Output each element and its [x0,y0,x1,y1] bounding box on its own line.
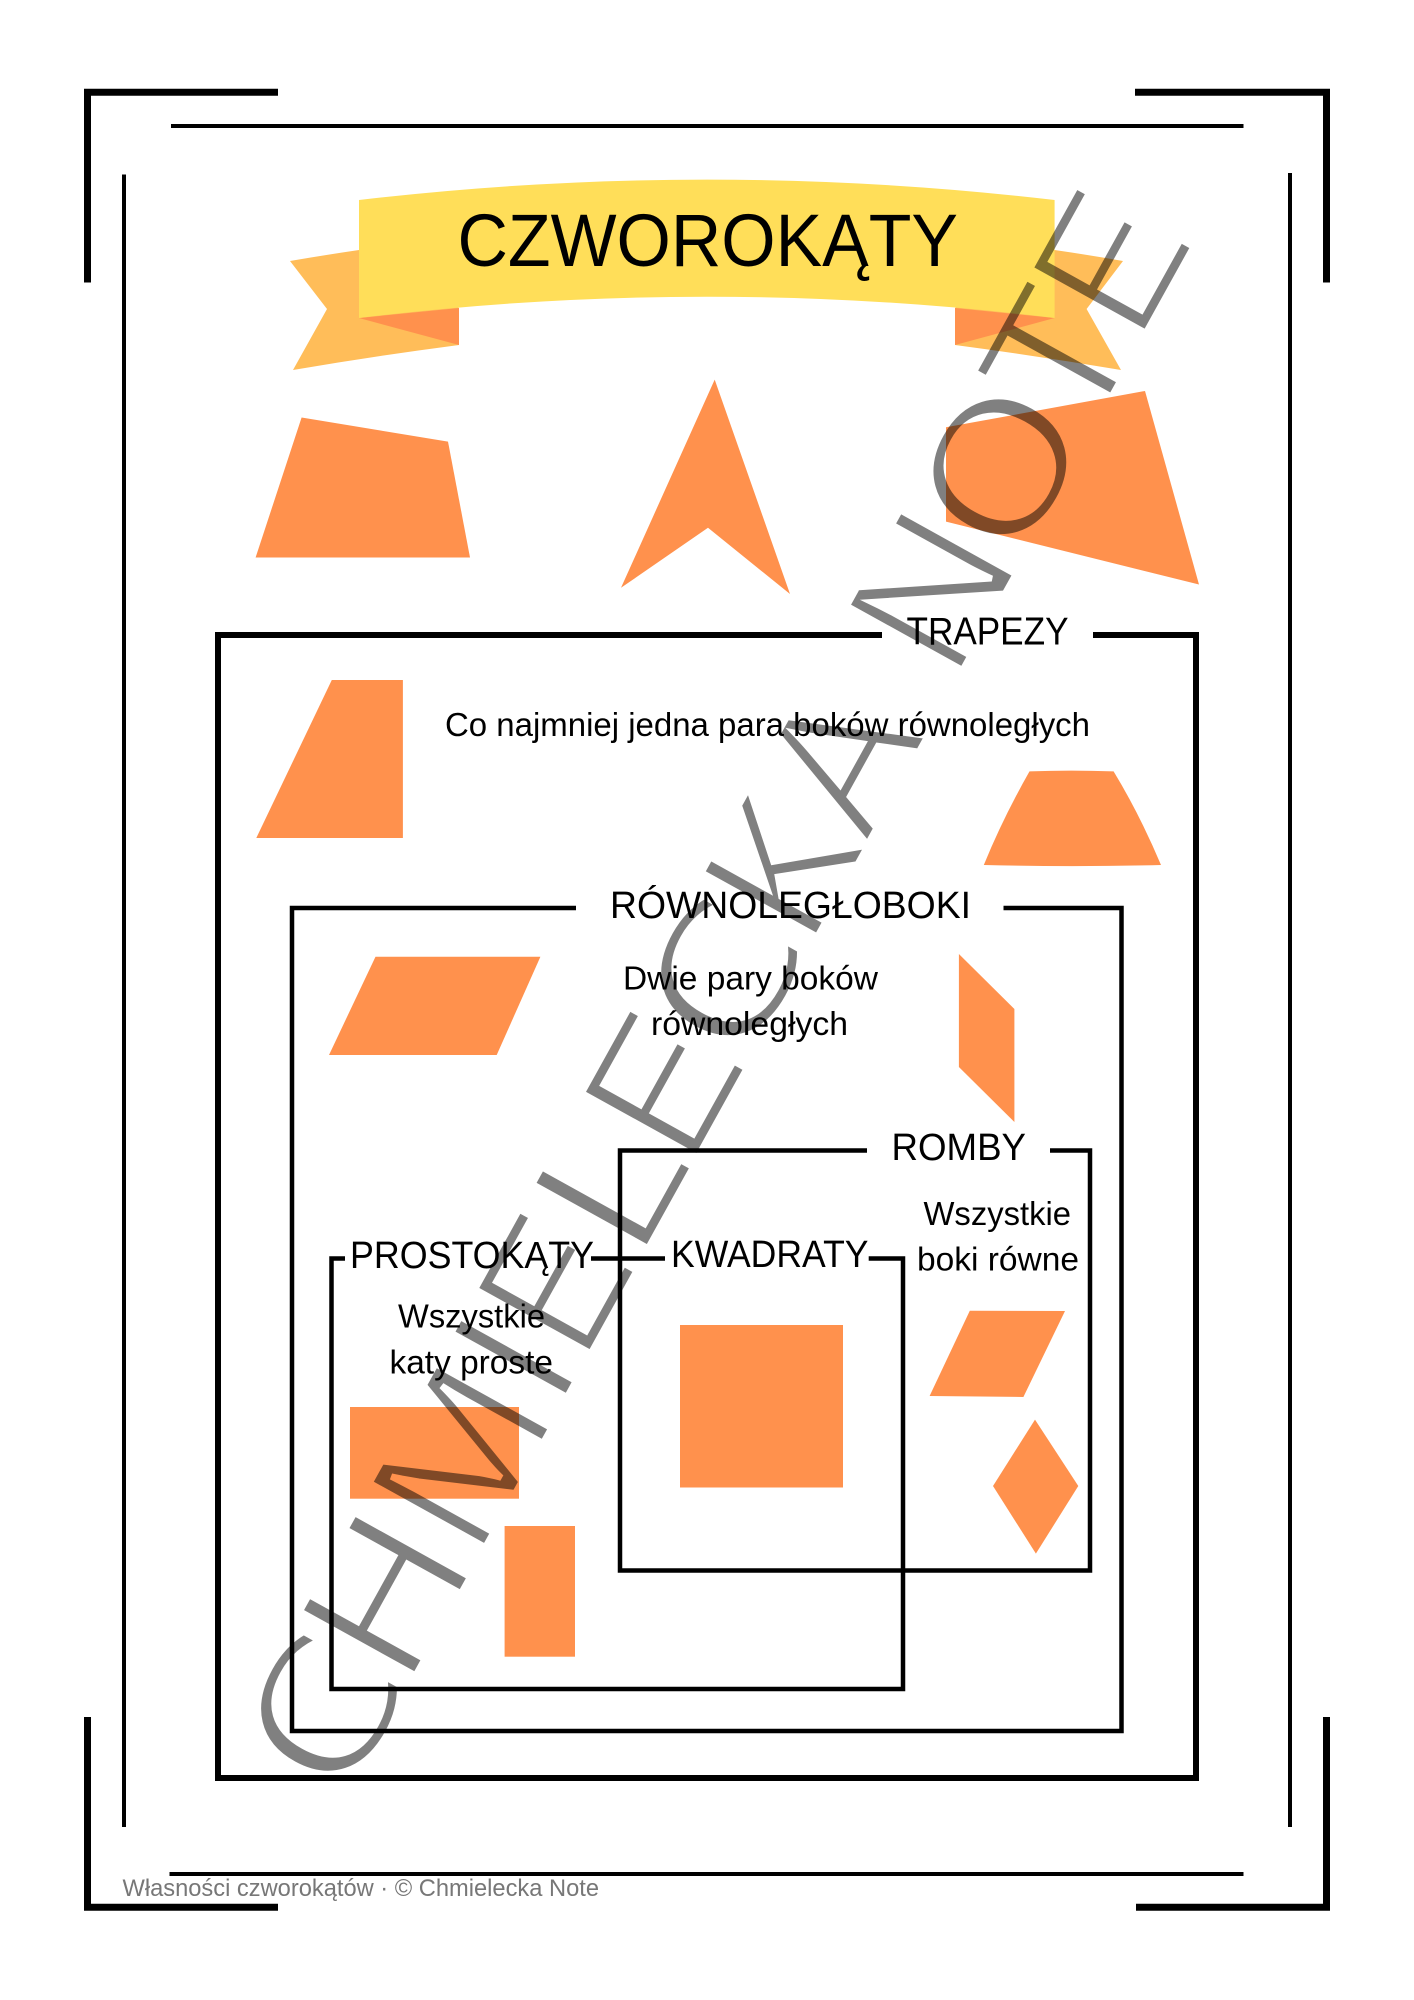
prostokąty description [390,1298,553,1381]
shape: rhombus slanted [930,1311,1065,1397]
watermark: CHMIELECKA NOTE: H [256,1478,514,1710]
title: CZWOROKĄTY [458,199,958,282]
outer frame: corner brackets and thin lines [88,92,1326,1907]
panel: romby [620,1127,1090,1570]
panel: trapezy [218,610,1196,1778]
prostokąty frame [332,1258,903,1689]
banner right tail [955,250,1123,370]
shape: irregular quadrilateral [256,418,470,558]
general quadrilaterals [256,380,1199,594]
romby description: Wszystkie [924,1195,1071,1232]
shape: right quadrilateral [946,391,1199,584]
trapezy frame [218,635,1196,1778]
równoległoboki description: Dwie pary boków [623,960,878,996]
watermark: CHMIELECKA NOTE: A [716,652,964,865]
równoległoboki description: równoległych [651,1005,848,1042]
watermark: CHMIELECKA NOTE: E [539,978,787,1190]
równoległoboki description [623,960,878,1042]
heading: kwadraty: KWADRATY [671,1234,868,1276]
shape: vertical parallelogram [959,954,1014,1122]
równoległoboki frame [292,908,1122,1731]
title banner [290,180,1123,370]
shape: tall rectangle [505,1526,575,1657]
heading: równoległoboki: RÓWNOLEGŁOBOKI [610,884,971,927]
watermark: CHMIELECKA NOTE: C [201,1600,451,1827]
shape: rhombus diamond [993,1420,1078,1554]
footer: Własności czworokątów · © Chmielecka Note [122,1875,599,1902]
shape: isosceles trapezoid [984,771,1161,866]
heading: romby: ROMBY [892,1127,1026,1169]
shape: right trapezoid [256,680,403,838]
banner left tail [290,250,459,370]
watermark: CHMIELECKA NOTE: O [873,347,1133,590]
trapezy description: Co najmniej jedna para boków równoległych [445,706,1090,743]
shape: square [680,1325,843,1488]
banner ribbon [359,180,1055,318]
watermark: CHMIELECKA NOTE: I [406,1281,620,1432]
banner right fold [955,308,1055,345]
panel: kwadraty [671,1234,868,1488]
watermark: CHMIELECKA NOTE: N [803,476,1060,704]
watermark: CHMIELECKA NOTE: T [936,254,1180,459]
watermark: CHMIELECKA NOTE: E [987,156,1233,365]
romby description [917,1195,1079,1278]
panel: prostokąty [332,1235,903,1689]
prostokąty description: Wszystkie [398,1298,545,1335]
heading: prostokąty: PROSTOKĄTY [350,1235,594,1277]
watermark: CHMIELECKA NOTE: L [487,1076,732,1283]
romby frame [620,1150,1090,1570]
watermark: CHMIELECKA NOTE: M [325,1329,595,1581]
watermark: CHMIELECKA NOTE: E [432,1180,676,1385]
banner left fold [359,308,459,345]
panel: równoległoboki [292,884,1122,1731]
shape: parallelogram [329,957,540,1055]
heading: trapezy: TRAPEZY [906,610,1068,654]
shape: wide rectangle [350,1407,519,1499]
romby description: boki równe [917,1240,1079,1278]
watermark: CHMIELECKA NOTE [261,190,1190,1771]
shape: concave arrow quadrilateral [621,380,790,594]
watermark: CHMIELECKA NOTE: K [659,760,905,969]
watermark: CHMIELECKA NOTE: C [601,865,851,1091]
prostokąty description: katy proste [390,1344,553,1381]
